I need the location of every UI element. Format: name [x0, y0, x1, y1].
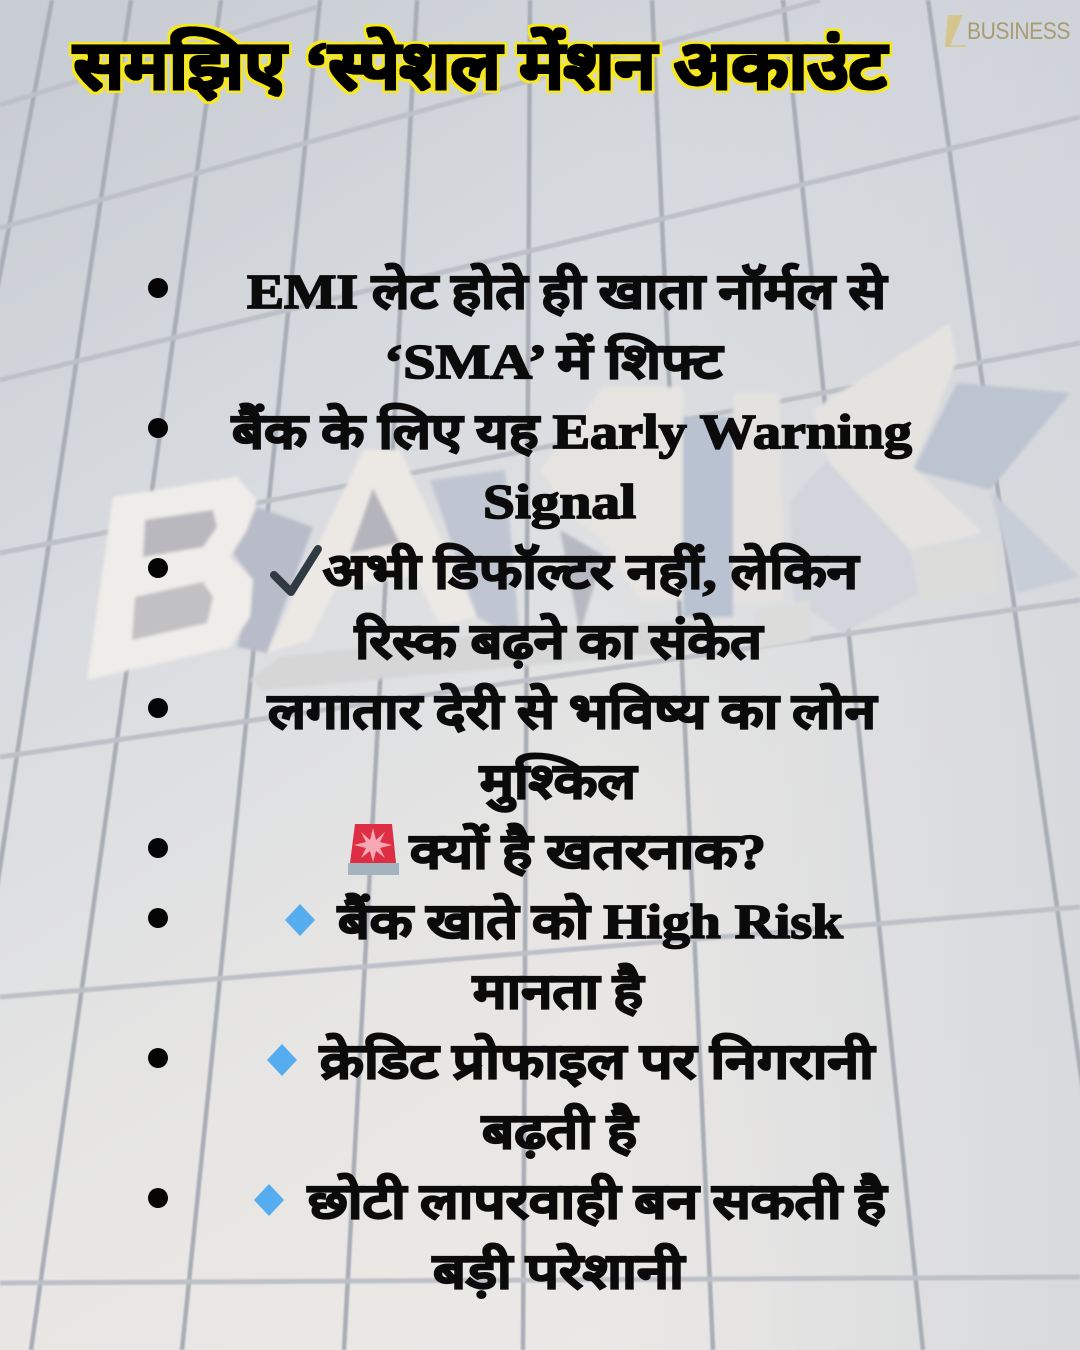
text: credit profile: बढ़ती है: [481, 1103, 639, 1159]
icon: blue diamond: [285, 904, 315, 936]
title: समझिए ‘स्पेशल मेंशन अकाउंट: [72, 27, 889, 103]
text: credit profile: [319, 1033, 877, 1159]
text: high risk: बैंक खाते को High Risk: [337, 893, 844, 949]
background: blurred BANK 3D letters: [87, 323, 1080, 690]
icon: blue diamond: [267, 1044, 297, 1076]
text: early warning signal: बैंक के लिए यह Early Warning: [231, 403, 913, 459]
text: credit profile: क्रेडिट प्रोफाइल पर निगरानी: [319, 1033, 877, 1089]
text: early warning signal: Signal: [483, 474, 636, 529]
text: EMI late shifts to SMA: [247, 263, 888, 389]
bullet markers: [148, 278, 168, 1208]
logo: Z Business: [945, 15, 1070, 46]
text: high risk: मानता है: [472, 963, 645, 1019]
icon: blue diamond: [254, 1184, 284, 1216]
text: early warning signal: [231, 403, 913, 529]
text: future loan difficult: लगातार देरी से भविष्य का लोन: [267, 683, 878, 739]
text: small carelessness: [307, 1173, 888, 1299]
text: future loan difficult: [267, 683, 878, 812]
text: not a default yet: [323, 543, 860, 669]
icon: check mark: [274, 549, 318, 592]
text: EMI late shifts to SMA: EMI लेट होते ही खाता नॉर्मल से: [247, 263, 888, 319]
icon: rotating alarm light: [348, 824, 399, 875]
text: EMI late shifts to SMA: ‘SMA’ में शिफ्ट: [384, 333, 725, 389]
text: small carelessness: बड़ी परेशानी: [432, 1243, 687, 1299]
text: high risk: [337, 893, 844, 1019]
text: not a default yet: अभी डिफॉल्टर नहीं, लेकिन: [323, 543, 860, 599]
text: future loan difficult: मुश्किल: [479, 753, 638, 812]
text: not a default yet: रिस्क बढ़ने का संकेत: [354, 613, 764, 669]
text: why dangerous: क्यों है खतरनाक?: [409, 823, 766, 879]
text: small carelessness: छोटी लापरवाही बन सकती है: [307, 1173, 888, 1229]
